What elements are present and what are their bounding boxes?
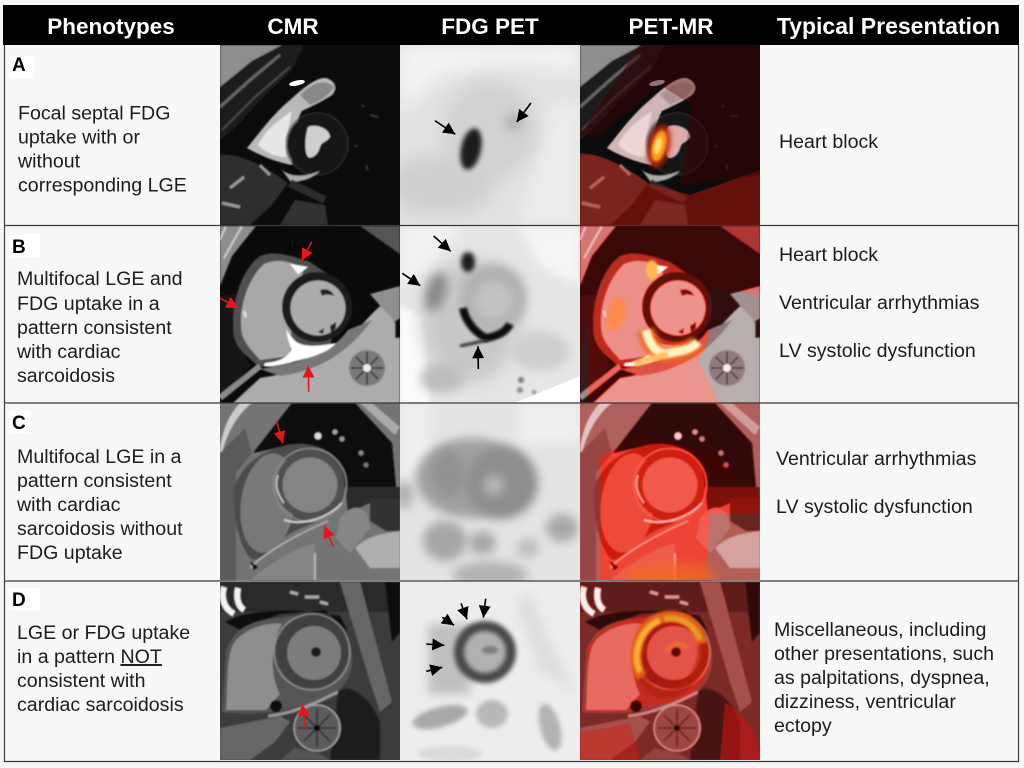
header: PET-MR: PET-MR <box>628 14 714 39</box>
label D: D <box>12 590 26 611</box>
typical presentation A: Heart block <box>779 131 878 153</box>
label C: C <box>12 413 26 434</box>
typical presentation D: ectopy <box>774 715 832 737</box>
typical presentation D: other presentations, such <box>774 643 994 665</box>
label C <box>9 411 31 434</box>
typical presentation B: LV systolic dysfunction <box>779 340 976 362</box>
typical presentation D: dizziness, ventricular <box>774 691 956 713</box>
panel: row B CMR image <box>220 226 400 402</box>
header: FDG PET: FDG PET <box>441 14 539 39</box>
description C: pattern consistent <box>17 470 172 492</box>
label B <box>9 235 40 258</box>
arrows: row A PET <box>435 103 531 134</box>
panel: row B FDG PET image <box>400 226 580 402</box>
description C: with cardiac <box>16 494 121 516</box>
description B: Multifocal LGE and <box>17 268 183 290</box>
description B: with cardiac <box>16 341 121 363</box>
header bar <box>3 5 1019 45</box>
label B: B <box>12 237 26 258</box>
typical presentation B: Heart block <box>779 244 878 266</box>
description A: Focal septal FDG <box>18 102 170 124</box>
arrows: row C CMR <box>277 421 333 546</box>
description C: FDG uptake <box>17 542 123 564</box>
description B: pattern consistent <box>17 317 172 339</box>
description D: cardiac sarcoidosis <box>17 694 184 716</box>
right column cells <box>760 45 1018 761</box>
panel: row A PET-MR image <box>580 45 760 225</box>
header: Phenotypes: Phenotypes <box>47 14 175 39</box>
row A text: phenotype description <box>9 55 187 196</box>
typical presentation C: Ventricular arrhythmias <box>776 448 977 470</box>
phenotype text cells <box>5 45 220 761</box>
description D: consistent with <box>17 670 146 692</box>
panel: row A FDG PET image <box>400 45 580 225</box>
panel: row D FDG PET image <box>400 582 580 760</box>
description A: corresponding LGE <box>18 174 187 196</box>
label A <box>9 55 34 78</box>
description A: uptake with or <box>18 126 140 148</box>
description C: Multifocal LGE in a <box>17 446 182 468</box>
row B text: phenotype description <box>9 235 183 387</box>
row D text: phenotype description <box>9 588 190 716</box>
panel: row C PET-MR image <box>580 404 760 580</box>
panel: row C CMR image <box>220 404 400 580</box>
label D <box>9 588 40 611</box>
arrows: row D PET <box>426 599 486 671</box>
description D: in a pattern NOT <box>17 646 162 668</box>
typical presentation D: Miscellaneous, including <box>774 619 986 641</box>
arrow: row D CMR <box>302 704 306 729</box>
arrows: row B CMR <box>220 242 312 392</box>
description C: sarcoidosis without <box>17 518 183 540</box>
panel: row B PET-MR image <box>580 226 760 402</box>
panel: row C FDG PET image <box>400 404 580 580</box>
description D: LGE or FDG uptake <box>17 622 190 644</box>
panel: row A CMR image <box>220 45 400 225</box>
label A: A <box>12 55 26 76</box>
header: CMR: CMR <box>267 14 319 39</box>
description B: sarcoidosis <box>17 365 115 387</box>
panel: row D CMR image <box>220 582 400 760</box>
arrows: row B PET <box>402 236 478 369</box>
typical presentation B: Ventricular arrhythmias <box>779 292 980 314</box>
typical presentation C: LV systolic dysfunction <box>776 496 973 518</box>
typical presentation D: as palpitations, dyspnea, <box>774 667 990 689</box>
row C text: phenotype description <box>9 411 183 564</box>
description A: without <box>17 150 81 172</box>
panel: row D PET-MR image <box>580 582 760 760</box>
header: Typical Presentation: Typical Presentation <box>777 13 1000 39</box>
description B: FDG uptake in a <box>17 293 160 315</box>
